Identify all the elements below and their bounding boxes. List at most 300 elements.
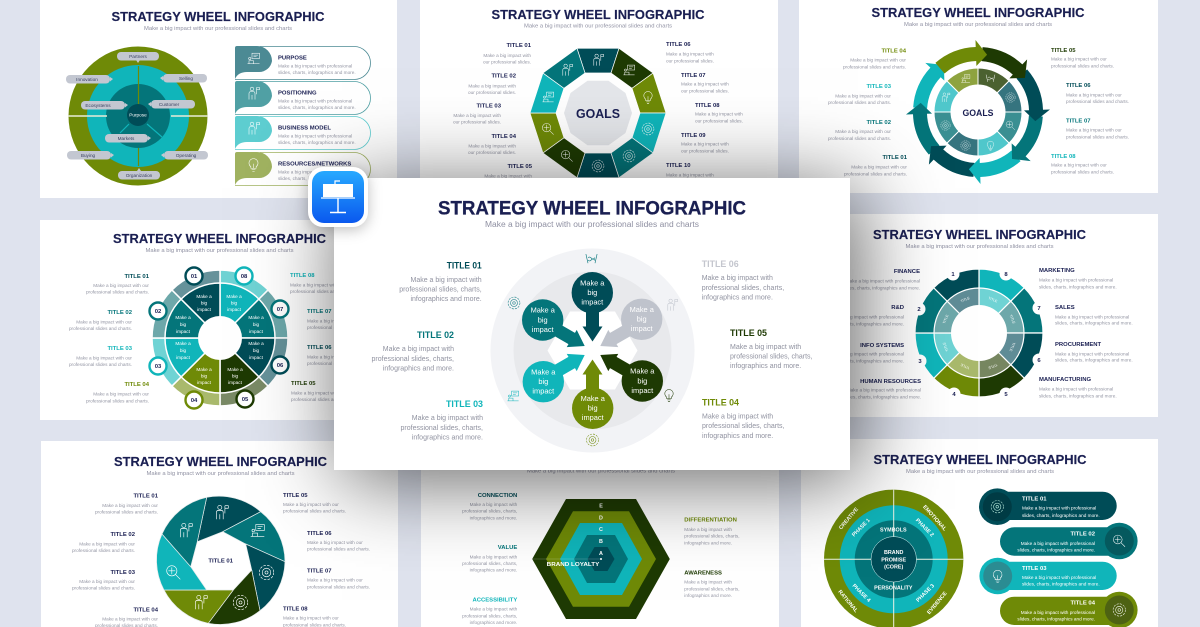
label: title 06: TITLE 06 bbox=[307, 345, 332, 351]
icon: gear bbox=[592, 160, 604, 172]
label: title 01: Make a big impact with our bbox=[102, 503, 158, 508]
chart: departments wheel: TITLE bbox=[942, 341, 949, 352]
node: bottom: big bbox=[588, 404, 598, 413]
label: title 01: Make a big impact with bbox=[483, 53, 531, 58]
badge 02: 02 bbox=[155, 309, 162, 315]
card: purpose bbox=[235, 46, 370, 80]
icon: segment 4 bbox=[987, 141, 994, 150]
chart: nested hexagons: A bbox=[599, 551, 603, 557]
icon: person with flag bbox=[180, 523, 192, 537]
label: title 03: professional slides and charts. bbox=[69, 362, 132, 367]
label: title 01: TITLE 01 bbox=[124, 274, 150, 280]
label: title 08 bbox=[283, 607, 346, 627]
label: title 02: professional slides and charts. bbox=[828, 136, 891, 141]
label: title 05: Make a big impact with bbox=[484, 174, 532, 178]
label: value: professional slides, charts, bbox=[462, 561, 517, 566]
icon: person upper right bbox=[668, 299, 678, 311]
label: title 03: TITLE 03 bbox=[110, 570, 136, 576]
sector text 02: Make a bbox=[175, 315, 191, 320]
sector text 03 bbox=[175, 341, 191, 360]
label: title 08: TITLE 08 bbox=[695, 103, 720, 109]
label: title 01: professional slides and charts. bbox=[95, 510, 158, 514]
pill: Customer: Customer bbox=[159, 102, 180, 107]
label: connection: CONNECTION bbox=[478, 493, 517, 499]
icon: segment 5 bbox=[961, 141, 970, 150]
pill: Ecosystems bbox=[81, 101, 128, 110]
label: differentiation bbox=[684, 518, 740, 545]
sector text 06: Make a bbox=[248, 341, 264, 346]
label: procurement: Make a big impact with professional bbox=[1055, 352, 1129, 356]
sector text 07: big bbox=[253, 322, 260, 327]
chart: nested hexagons: C bbox=[599, 527, 603, 533]
badge 03: 03 bbox=[155, 364, 162, 370]
label: title 08: our professional slides. bbox=[695, 118, 743, 124]
pill: Selling: Selling bbox=[179, 76, 193, 81]
pill: Selling bbox=[160, 74, 207, 82]
chart: concentric business wheel bbox=[66, 46, 208, 186]
pill: title 01: Make a big impact with professional bbox=[1022, 505, 1096, 510]
label: value: Make a big impact with bbox=[470, 554, 518, 559]
badge 03 bbox=[150, 358, 166, 374]
label: title 03: professional slides and charts. bbox=[828, 100, 891, 105]
label: title 05: professional slides and charts. bbox=[283, 508, 346, 514]
icon: segment 6 bbox=[941, 121, 950, 130]
label: title 04: Make a big impact with our bbox=[93, 392, 149, 396]
chart: numbered sector wheel bbox=[138, 256, 302, 420]
label: title 06 bbox=[666, 42, 714, 64]
label: value: infographics and more. bbox=[470, 568, 517, 573]
subtitle: slide 4: Make a big impact with our professional slides and charts bbox=[146, 248, 294, 254]
sector text 08 bbox=[226, 294, 242, 312]
label: title 02 bbox=[828, 120, 892, 141]
number 1 bbox=[946, 268, 960, 280]
label: finance: FINANCE bbox=[894, 269, 920, 275]
label: title 06: TITLE 06 bbox=[702, 259, 739, 269]
label: title 10: Make a big impact with bbox=[666, 172, 714, 178]
icon: compass bbox=[642, 123, 654, 135]
heading: slide 5 title: STRATEGY WHEEL INFOGRAPHIC bbox=[873, 227, 1086, 242]
sector text 03: big bbox=[180, 348, 187, 353]
label: connection bbox=[462, 493, 518, 520]
card: purpose: PURPOSE bbox=[278, 56, 307, 62]
label: title 02 bbox=[468, 74, 517, 95]
node: upper left bbox=[522, 299, 563, 341]
label: title 05: TITLE 05 bbox=[730, 328, 767, 338]
subtitle: slide 3: Make a big impact with our professional slides and charts bbox=[904, 22, 1052, 28]
label: title 01 bbox=[483, 43, 532, 64]
label: title 08: Make a big impact with our bbox=[290, 282, 346, 288]
label: manufacturing: MANUFACTURING bbox=[1039, 377, 1091, 383]
sector text 07: impact bbox=[249, 329, 264, 334]
label: title 02: Make a big impact with bbox=[383, 346, 454, 353]
icon: segment 3 bbox=[1006, 121, 1015, 130]
label: differentiation: professional slides, charts, bbox=[684, 534, 740, 539]
label: title 05: TITLE 05 bbox=[507, 164, 533, 170]
label: title 06: Make a big impact with bbox=[702, 275, 773, 282]
label: title 02: TITLE 02 bbox=[491, 74, 517, 80]
label: title 05: TITLE 05 bbox=[283, 493, 308, 499]
label: title 03: Make a big impact with bbox=[412, 415, 483, 422]
badge 06: 06 bbox=[277, 363, 284, 369]
heading: main title: STRATEGY WHEEL INFOGRAPHIC bbox=[438, 198, 746, 220]
label: title 08 bbox=[1051, 154, 1114, 174]
pill: title 04: slides, charts, infographics and more. bbox=[1017, 617, 1095, 622]
icon: bulb lower right bbox=[665, 389, 673, 401]
label: title 07: Make a big impact with our bbox=[1066, 128, 1122, 132]
label: awareness: professional slides, charts, bbox=[684, 586, 740, 591]
label: procurement: slides, charts, infographics and more. bbox=[1055, 358, 1133, 362]
label: title 05: professional slides and charts. bbox=[291, 397, 354, 402]
label: title 03: TITLE 03 bbox=[446, 399, 483, 409]
label: marketing bbox=[1039, 268, 1117, 290]
label: title 06: professional slides and charts. bbox=[307, 546, 370, 552]
pill: Customer bbox=[148, 100, 195, 108]
chart: six arrow wheel bbox=[490, 248, 694, 452]
label: title 04 bbox=[468, 134, 517, 155]
label: title 03: TITLE 03 bbox=[107, 346, 133, 352]
label: title 10: TITLE 10 bbox=[666, 163, 691, 169]
card: resources/networks: slides, charts, infographics and more. bbox=[278, 176, 356, 181]
label: title 06: professional slides and charts. bbox=[1066, 99, 1129, 104]
card: positioning bbox=[235, 81, 370, 114]
chart: brand promise wheel: BRAND bbox=[884, 550, 904, 556]
icon: screen bbox=[251, 525, 264, 536]
label: title 04: TITLE 04 bbox=[702, 398, 739, 408]
pill: title 02: Make a big impact with professional bbox=[1021, 541, 1095, 546]
icon: person with flag bbox=[594, 54, 604, 66]
label: title 02 bbox=[372, 330, 454, 372]
label: title 03: Make a big impact with our bbox=[76, 356, 132, 360]
label: title 03: professional slides and charts. bbox=[72, 586, 135, 590]
badge 07: 07 bbox=[277, 307, 284, 313]
subtitle: slide 8: Make a big impact with our professional slides and charts bbox=[906, 469, 1054, 475]
pill: Organization: Organization bbox=[126, 173, 153, 178]
sector text 08: big bbox=[231, 300, 238, 306]
label: title 01: professional slides and charts. bbox=[844, 172, 907, 176]
heading: slide 4 title: STRATEGY WHEEL INFOGRAPHIC bbox=[113, 231, 326, 246]
sector text 05: Make a bbox=[227, 367, 243, 372]
label: title 05: TITLE 05 bbox=[1051, 48, 1076, 54]
label: title 05: Make a big impact with bbox=[730, 344, 801, 351]
label: sales: Make a big impact with professional bbox=[1055, 314, 1129, 320]
label: title 03 bbox=[72, 570, 136, 590]
chart: arrow ring wheel bbox=[897, 31, 1059, 193]
label: marketing: MARKETING bbox=[1039, 268, 1075, 274]
icon: magnifier bbox=[542, 123, 554, 135]
chart: brand promise wheel: PHASE 3 bbox=[915, 583, 936, 604]
label: title 02: professional slides and charts. bbox=[69, 326, 132, 331]
card: business model: slides, charts, infographics and more. bbox=[278, 140, 356, 145]
label: title 08: TITLE 08 bbox=[1051, 154, 1076, 160]
label: r&d: slides, charts, infographics and more. bbox=[826, 322, 904, 326]
chart: concentric business wheel: Purpose bbox=[129, 113, 147, 118]
label: finance: slides, charts, infographics and more. bbox=[842, 286, 920, 290]
pill: title 03: slides, charts, infographics and more. bbox=[1022, 582, 1100, 587]
chart: nested hexagons: D bbox=[599, 515, 603, 521]
label: title 01 bbox=[95, 494, 159, 514]
label: title 01: TITLE 01 bbox=[447, 260, 482, 270]
icon: network bbox=[216, 505, 228, 519]
label: title 04: Make a big impact with bbox=[702, 414, 773, 420]
chart: brand promise wheel: (CORE) bbox=[884, 565, 903, 571]
chart: departments wheel: TITLE bbox=[959, 362, 970, 370]
pill: Innovation: Innovation bbox=[76, 77, 98, 82]
label: title 02: professional slides and charts. bbox=[72, 548, 135, 553]
label: title 04: Make a big impact with bbox=[468, 144, 516, 148]
label: title 08 bbox=[695, 103, 743, 124]
pill: Organization bbox=[118, 168, 160, 180]
label: title 02: TITLE 02 bbox=[110, 532, 136, 538]
label: sales: SALES bbox=[1055, 305, 1075, 311]
sector text 06: big bbox=[253, 348, 260, 353]
label: title 01 bbox=[844, 155, 908, 176]
number 6: 6 bbox=[1037, 358, 1041, 364]
icon: segment 7 bbox=[942, 93, 950, 102]
node: lower right: big bbox=[637, 376, 647, 385]
label: title 08: Make a big impact with our bbox=[283, 616, 339, 621]
chart: departments wheel bbox=[902, 256, 1056, 410]
icon: keynote app badge bbox=[308, 167, 368, 227]
pill: Markets bbox=[105, 134, 151, 142]
label: info systems: slides, charts, infographics and more. bbox=[826, 358, 904, 364]
label: accessibility: infographics and more. bbox=[470, 620, 517, 625]
sector text 02: big bbox=[180, 322, 187, 327]
label: title 07: TITLE 07 bbox=[681, 73, 706, 79]
label: title 02: our professional slides. bbox=[468, 90, 516, 95]
card: resources/networks: Make a big impact with professional bbox=[278, 170, 352, 174]
chart: goals decagon bbox=[530, 48, 666, 178]
label: r&d: Make a big impact with professional bbox=[830, 314, 904, 320]
label: title 04 bbox=[95, 608, 159, 627]
label: title 04: TITLE 04 bbox=[491, 134, 517, 140]
heading: slide 2 title: STRATEGY WHEEL INFOGRAPHIC bbox=[492, 7, 705, 22]
label: title 09: TITLE 09 bbox=[681, 133, 706, 139]
icon: bicycles bbox=[561, 150, 573, 162]
chart: brand promise wheel: PHASE 2 bbox=[914, 518, 935, 538]
label: title 06: professional slides and charts. bbox=[307, 361, 370, 366]
subtitle: slide 6: Make a big impact with our professional slides and charts bbox=[146, 471, 295, 477]
number 4: 4 bbox=[952, 392, 956, 398]
label: title 04: professional slides and charts. bbox=[843, 64, 906, 70]
label: awareness: AWARENESS bbox=[684, 570, 722, 576]
label: title 01: our professional slides. bbox=[483, 60, 531, 64]
chart: departments wheel: TITLE bbox=[1009, 314, 1016, 325]
card: positioning: slides, charts, infographics and more. bbox=[278, 105, 356, 110]
label: human resources: slides, charts, infographics and more. bbox=[843, 394, 921, 400]
label: title 03 bbox=[453, 104, 502, 124]
label: differentiation: Make a big impact with bbox=[684, 527, 732, 532]
panel: main strategy wheel slide bbox=[334, 178, 850, 470]
label: title 02: infographics and more. bbox=[383, 366, 454, 372]
label: human resources: Make a big impact with professional bbox=[847, 388, 921, 392]
badge 05: 05 bbox=[242, 397, 249, 403]
sector text 05 bbox=[227, 367, 243, 385]
panel: slide 4 numbered wheel bbox=[40, 220, 370, 420]
label: differentiation: DIFFERENTIATION bbox=[684, 518, 737, 524]
node: top: big bbox=[587, 288, 597, 297]
pill: Partners bbox=[117, 52, 159, 63]
card: business model: Make a big impact with professional bbox=[278, 134, 352, 138]
badge 01 bbox=[186, 268, 202, 284]
label: title 04: Make a big impact with our bbox=[850, 58, 906, 62]
label: title 07: TITLE 07 bbox=[307, 569, 332, 575]
node: top: impact bbox=[581, 298, 603, 307]
sector text 02: impact bbox=[176, 329, 191, 334]
sector text 04: impact bbox=[197, 380, 212, 385]
label: awareness bbox=[684, 570, 740, 598]
label: human resources bbox=[843, 379, 921, 400]
icon: segment 1 bbox=[986, 75, 995, 82]
label: title 06: TITLE 06 bbox=[666, 42, 691, 48]
label: title 04: TITLE 04 bbox=[881, 48, 907, 54]
chart: aperture wheel bbox=[157, 496, 285, 624]
label: title 06 bbox=[1066, 83, 1129, 104]
label: title 04: professional slides, charts, bbox=[702, 423, 785, 430]
node: lower left: Make a bbox=[531, 367, 556, 376]
label: title 05: professional slides, charts, bbox=[730, 354, 813, 360]
chart: brand promise wheel bbox=[824, 490, 963, 627]
label: title 02: Make a big impact with bbox=[468, 84, 516, 88]
label: title 04 bbox=[86, 382, 150, 404]
label: title 02: TITLE 02 bbox=[866, 120, 892, 126]
icon: bicycles bbox=[233, 595, 248, 610]
label: finance bbox=[842, 269, 920, 290]
sector text 06: impact bbox=[249, 355, 264, 360]
chart: brand promise wheel: PERSONALITY bbox=[874, 586, 913, 592]
label: title 05 bbox=[291, 381, 354, 402]
chart: departments wheel: TITLE bbox=[960, 296, 971, 303]
icon: target upper left bbox=[508, 297, 520, 309]
badge 08: 08 bbox=[241, 274, 248, 280]
sector text 01: Make a bbox=[196, 294, 212, 299]
sector text 07 bbox=[248, 315, 264, 334]
label: title 07: our professional slides. bbox=[681, 88, 729, 94]
label: title 07: professional slides and charts. bbox=[1066, 134, 1129, 140]
sector text 05: big bbox=[232, 374, 239, 378]
icon: climber bbox=[195, 595, 207, 609]
label: r&d: R&D bbox=[891, 305, 904, 311]
number 3 bbox=[914, 354, 926, 368]
node: lower right: impact bbox=[631, 386, 653, 395]
node: lower left bbox=[523, 361, 564, 402]
label: title 05 bbox=[1051, 48, 1114, 68]
label: title 03: our professional slides. bbox=[453, 120, 501, 124]
icon: gear bottom bbox=[587, 434, 598, 446]
label: title 05 bbox=[484, 164, 533, 178]
icon: target bbox=[623, 150, 635, 162]
chart: brand promise wheel: RATIONAL bbox=[836, 589, 859, 615]
label: title 07: Make a big impact with our bbox=[307, 578, 363, 583]
number 6 bbox=[1032, 354, 1046, 366]
label: connection: professional slides, charts, bbox=[462, 509, 517, 514]
icon: screen bbox=[542, 92, 554, 102]
card: purpose: slides, charts, infographics and more. bbox=[278, 70, 356, 75]
number 8 bbox=[1000, 268, 1012, 280]
label: title 01: TITLE 01 bbox=[133, 494, 159, 500]
label: title 05 bbox=[283, 493, 346, 514]
label: title 05: infographics and more. bbox=[730, 363, 801, 370]
label: title 06: TITLE 06 bbox=[1066, 83, 1091, 89]
label: title 06: professional slides, charts, bbox=[702, 285, 784, 292]
label: title 01: Make a big impact with bbox=[410, 277, 482, 284]
icon: segment 8 bbox=[961, 75, 970, 82]
label: manufacturing bbox=[1039, 377, 1117, 398]
panel: slide 8 brand promise wheel bbox=[801, 439, 1158, 627]
center label: TITLE 01 bbox=[208, 559, 234, 565]
label: title 03: infographics and more. bbox=[412, 434, 483, 442]
label: title 01: professional slides and charts. bbox=[86, 290, 149, 294]
panel: slide 2 goals decagon bbox=[420, 0, 778, 180]
label: title 05: professional slides and charts. bbox=[1051, 64, 1114, 68]
label: procurement: PROCUREMENT bbox=[1055, 342, 1102, 348]
card: resources/networks bbox=[235, 152, 370, 186]
label: title 01: infographics and more. bbox=[410, 296, 482, 303]
pill: Operating: Operating bbox=[176, 153, 197, 158]
node: upper left: impact bbox=[532, 325, 554, 334]
label: connection: Make a big impact with bbox=[470, 502, 518, 507]
subtitle: slide 7: Make a big impact with our professional slides and charts bbox=[527, 468, 675, 474]
badge 04: 04 bbox=[191, 398, 198, 404]
label: title 08: TITLE 08 bbox=[283, 607, 308, 613]
label: accessibility: professional slides, charts, bbox=[462, 613, 517, 618]
label: title 06: Make a big impact with bbox=[666, 52, 714, 56]
pill: Markets: Markets bbox=[118, 136, 135, 141]
label: accessibility: Make a big impact with bbox=[470, 607, 518, 612]
node: upper right: impact bbox=[631, 324, 653, 333]
panel: slide 1 business model wheel bbox=[40, 0, 397, 198]
node: upper left: Make a bbox=[531, 306, 556, 315]
badge 08 bbox=[236, 268, 252, 284]
number 2: 2 bbox=[917, 307, 921, 313]
panel: slide 5 departments wheel bbox=[800, 214, 1158, 417]
label: title 02 bbox=[72, 532, 136, 553]
pill: title 02: slides, charts, infographics and more. bbox=[1017, 547, 1095, 552]
label: title 05: Make a big impact with our bbox=[291, 390, 347, 396]
label: title 05: Make a big impact with our bbox=[283, 502, 339, 507]
label: title 08 bbox=[290, 273, 353, 294]
node: bottom: Make a bbox=[581, 394, 606, 403]
label: title 01: Make a big impact with our bbox=[851, 164, 907, 170]
label: sales: slides, charts, infographics and more. bbox=[1055, 320, 1133, 326]
label: title 03: Make a big impact with bbox=[453, 113, 501, 118]
label: title 04: professional slides and charts. bbox=[86, 398, 149, 404]
label: info systems: Make a big impact with professional bbox=[830, 352, 904, 356]
chart: brand promise wheel: SYMBOLS bbox=[880, 527, 907, 533]
sector text 04: big bbox=[201, 374, 208, 378]
heading: slide 8 title: STRATEGY WHEEL INFOGRAPHIC bbox=[874, 452, 1087, 467]
label: human resources: HUMAN RESOURCES bbox=[860, 379, 921, 385]
chart: departments wheel: TITLE bbox=[1008, 342, 1016, 353]
number 2 bbox=[912, 302, 926, 316]
sector text 08: impact bbox=[227, 307, 242, 312]
icon: handshake top bbox=[586, 254, 597, 263]
heading: slide 6 title: STRATEGY WHEEL INFOGRAPHIC bbox=[114, 454, 327, 469]
node: upper left: big bbox=[538, 315, 548, 324]
sector text 06 bbox=[248, 341, 264, 360]
label: finance: Make a big impact with professional bbox=[846, 278, 920, 284]
label: title 01 bbox=[86, 274, 150, 294]
sector text 05: impact bbox=[228, 380, 243, 385]
badge 06 bbox=[272, 356, 288, 374]
number 5 bbox=[1000, 388, 1012, 400]
pill: title 01 bbox=[979, 488, 1117, 525]
card: resources/networks: RESOURCES/NETWORKS bbox=[278, 162, 351, 168]
pill: title 01: TITLE 01 bbox=[1022, 497, 1047, 503]
label: manufacturing: slides, charts, infographics and more. bbox=[1039, 394, 1117, 398]
label: title 07: Make a big impact with bbox=[681, 82, 729, 86]
chart: nested hexagons: E bbox=[599, 504, 603, 510]
icon: shield bbox=[1113, 535, 1125, 547]
